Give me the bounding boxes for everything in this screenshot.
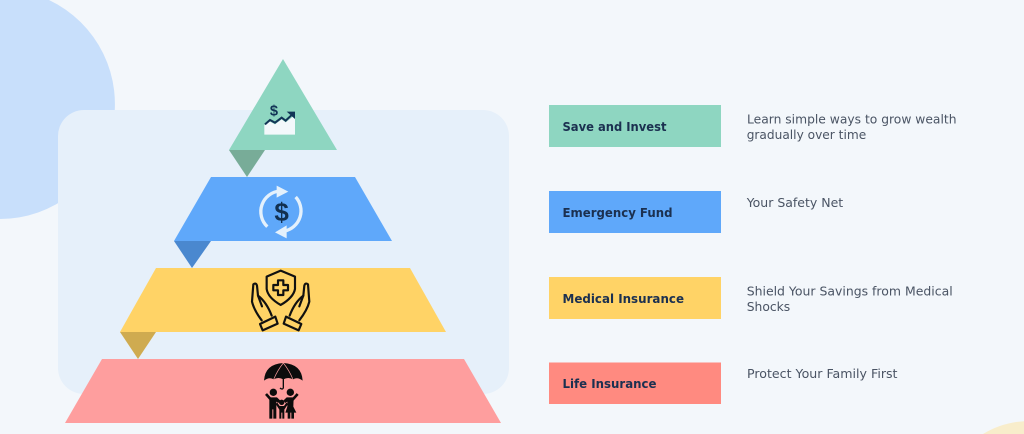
description: Your Safety Net [746, 196, 843, 211]
label box [549, 191, 721, 233]
background panel [58, 110, 509, 394]
tier: emergency fund [174, 177, 392, 268]
label box [549, 105, 721, 147]
label text: Emergency Fund [562, 206, 672, 221]
decorative circle: bottom right [983, 421, 1024, 434]
icon: shield and hands [252, 271, 309, 330]
label text: Life Insurance [562, 377, 657, 392]
description: Protect Your Family First [747, 367, 898, 382]
icon: dollar cycle: $ [274, 197, 289, 227]
description: Shocks [747, 300, 791, 315]
tier: medical insurance [120, 268, 446, 359]
label box [549, 362, 721, 404]
icon: growth chart: $ [270, 104, 278, 120]
icon: family under umbrella [264, 363, 303, 419]
legend row: save and invest [549, 105, 956, 147]
decorative circle: top left [0, 0, 115, 219]
legend row: medical insurance [549, 277, 953, 319]
legend row: life insurance [549, 362, 898, 404]
tier: life insurance [65, 359, 501, 423]
icon: dollar cycle [261, 186, 301, 238]
legend row: emergency fund [549, 191, 843, 233]
description: gradually over time [747, 128, 866, 143]
description: Shield Your Savings from Medical [747, 284, 953, 299]
tier: save and invest [229, 59, 337, 177]
pyramid [65, 59, 501, 423]
label text: Save and Invest [562, 120, 666, 135]
description: Learn simple ways to grow wealth [747, 112, 956, 127]
label text: Medical Insurance [562, 292, 684, 307]
label box [549, 277, 721, 319]
